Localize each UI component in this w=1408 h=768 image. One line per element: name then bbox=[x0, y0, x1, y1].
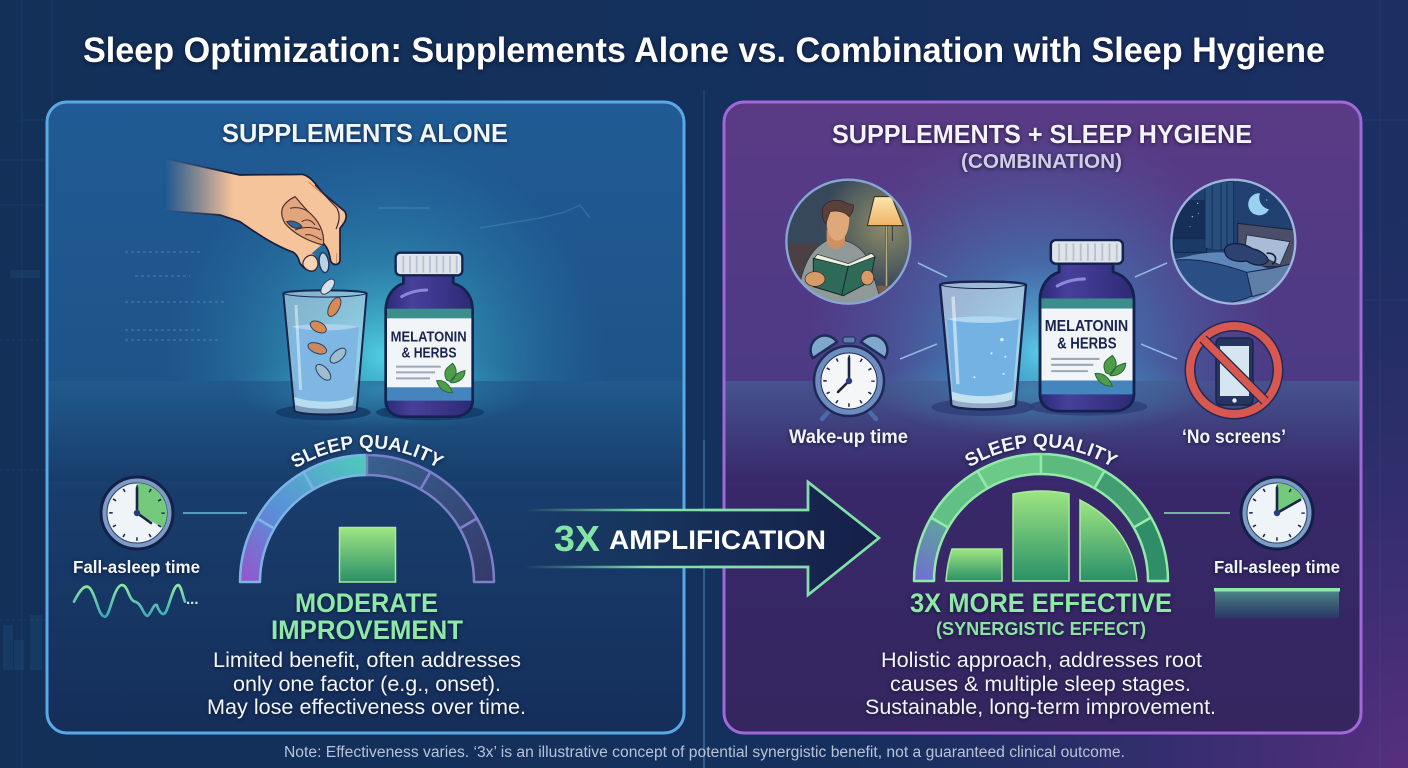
description text: May lose effectiveness over time. bbox=[207, 695, 526, 719]
gauge label: SLEEP QUALITY bbox=[964, 432, 1119, 468]
description text: Holistic approach, addresses root bbox=[881, 648, 1202, 672]
bars: amplified result bbox=[946, 491, 1137, 581]
label: fall-asleep time: Fall-asleep time bbox=[73, 557, 200, 577]
result heading bbox=[271, 588, 463, 645]
footnote: Note: Effectiveness varies. ‘3x’ is an illustrative concept of potential synergistic benefit, not a guaranteed clinical outcome. bbox=[284, 744, 1125, 761]
description text: causes & multiple sleep stages. bbox=[890, 672, 1191, 696]
illustration: supplement bottle: MELATONIN bbox=[1045, 318, 1128, 335]
gauge: sleep quality, partial bbox=[238, 434, 496, 584]
description text: Limited benefit, often addresses bbox=[213, 648, 521, 672]
illustration: supplement bottle bbox=[1028, 240, 1147, 416]
label: wake-up time: Wake-up time bbox=[789, 427, 908, 448]
result heading: MODERATE bbox=[295, 588, 438, 618]
gauge label: SLEEP QUALITY bbox=[290, 434, 445, 470]
chart: erratic sleep wave: ... bbox=[186, 591, 199, 608]
icon: alarm clock, wake-up time bbox=[811, 336, 887, 419]
result heading: 3X MORE EFFECTIVE bbox=[910, 588, 1172, 618]
illustration: hand dropping pills bbox=[160, 159, 346, 273]
illustration: glass of water bbox=[931, 282, 1035, 416]
arrow label: 3X: 3X bbox=[554, 518, 600, 559]
chart: steady sleep line bbox=[1214, 588, 1340, 618]
result subheading: (SYNERGISTIC EFFECT) bbox=[936, 618, 1146, 639]
icon: clock, fall-asleep time bbox=[101, 477, 173, 549]
panel subheading: (COMBINATION) bbox=[961, 151, 1122, 173]
panel: supplements alone bbox=[46, 100, 686, 734]
illustration: supplement bottle: MELATONIN bbox=[391, 330, 467, 346]
icon: clock, fall-asleep time bbox=[1241, 477, 1313, 549]
illustration: supplement bottle: & HERBS bbox=[401, 345, 457, 361]
bar: moderate result bbox=[340, 528, 396, 582]
illustration: supplement bottle: & HERBS bbox=[1057, 336, 1117, 352]
result heading: IMPROVEMENT bbox=[271, 615, 463, 645]
connector line bbox=[183, 512, 247, 514]
connector lines bbox=[900, 263, 1177, 359]
icon: no screens bbox=[1190, 326, 1278, 414]
description text: only one factor (e.g., onset). bbox=[233, 672, 501, 696]
gauge: sleep quality, full bbox=[912, 432, 1170, 582]
description text bbox=[865, 648, 1216, 719]
description text: Sustainable, long-term improvement. bbox=[865, 695, 1216, 719]
arrow: 3x amplification bbox=[525, 482, 879, 595]
arrow label: amplification: AMPLIFICATION bbox=[609, 525, 826, 555]
connector line bbox=[1164, 512, 1230, 514]
chart: erratic sleep wave bbox=[74, 585, 199, 617]
illustration: supplement bottle bbox=[376, 253, 484, 420]
title: Sleep Optimization: Supplements Alone vs. Combination with Sleep Hygiene bbox=[83, 31, 1325, 70]
label: no screens: ‘No screens’ bbox=[1182, 427, 1286, 448]
panel: supplements plus sleep hygiene bbox=[722, 100, 1362, 734]
illustration: glass of water with pills bbox=[276, 277, 371, 420]
icon: reading before bed bbox=[785, 178, 913, 309]
description text bbox=[207, 648, 526, 719]
panel heading: SUPPLEMENTS + SLEEP HYGIENE bbox=[832, 121, 1252, 149]
panel heading: SUPPLEMENTS ALONE bbox=[222, 120, 508, 148]
icon: dark bedroom with sleep mask bbox=[1170, 178, 1298, 308]
label: fall-asleep time: Fall-asleep time bbox=[1214, 557, 1340, 577]
